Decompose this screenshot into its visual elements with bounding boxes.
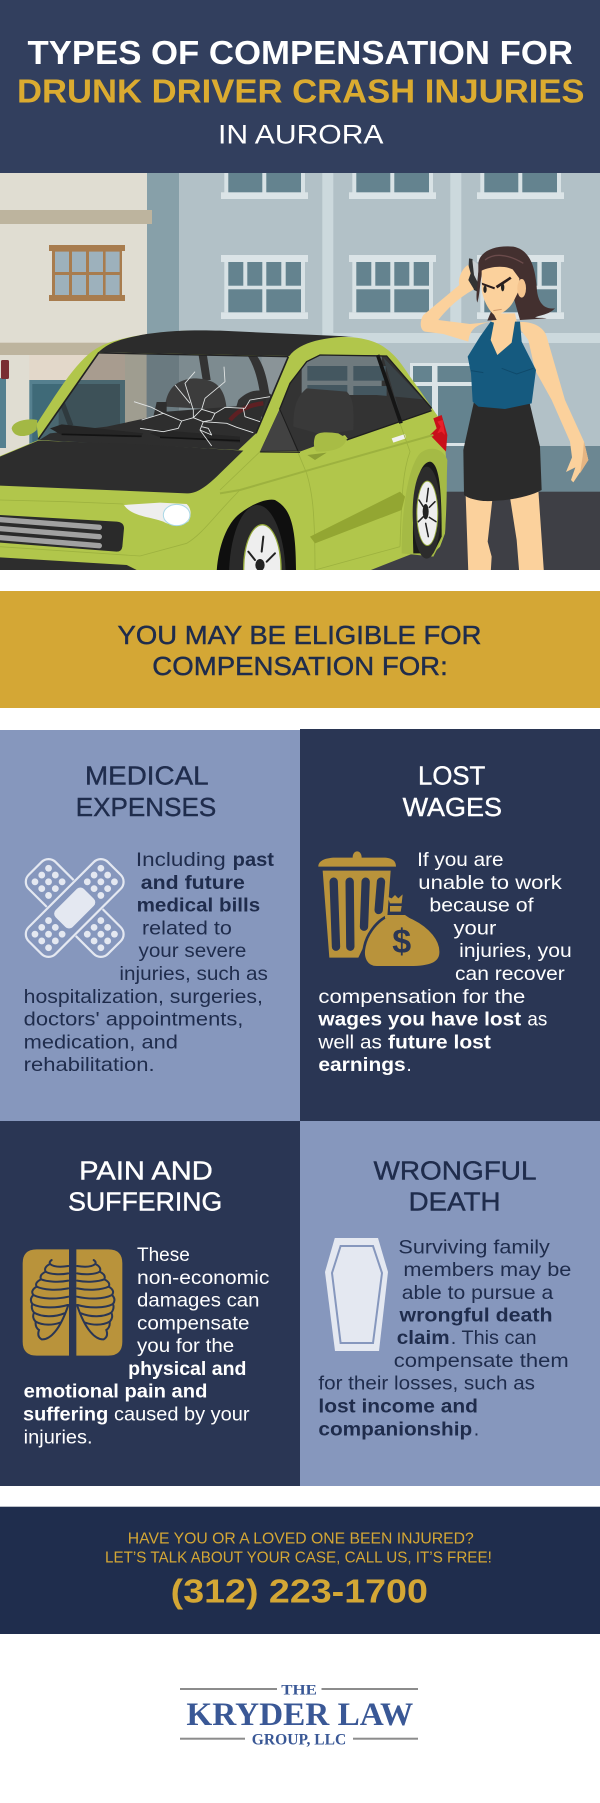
text: lost wages description: unable to work [418, 872, 562, 894]
text: lost wages description: . [406, 1054, 412, 1076]
text: pain and suffering description: compensate [137, 1312, 250, 1334]
phone number: (312) 223-1700 [171, 1573, 428, 1610]
icon: trash can and money bag: $ [392, 923, 411, 961]
logo: The Kryder Law Group: GROUP, LLC [252, 1731, 346, 1748]
text: pain and suffering description [23, 1244, 270, 1448]
text: medical expenses description: Including [136, 849, 226, 871]
text: wrongful death description: members may be [403, 1259, 571, 1281]
text: wrongful death description: for their losses, such as [318, 1373, 535, 1395]
text: lost wages description: earnings [318, 1054, 406, 1076]
text: wrongful death description: lost income and [318, 1396, 478, 1418]
front wheel [216, 500, 296, 570]
heading: lost wages: LOST [418, 761, 485, 791]
call to action panel [0, 1507, 600, 1634]
heading: pain and suffering: PAIN AND [79, 1155, 213, 1185]
text: wrongful death description: claim [397, 1327, 450, 1349]
text: wrongful death description: companionship [318, 1418, 472, 1440]
text: medical expenses description: related to [142, 917, 232, 939]
side window [260, 353, 437, 453]
text: lost wages description: If you are [417, 849, 504, 871]
heading: lost wages [403, 761, 502, 822]
windshield cracks [134, 367, 270, 446]
header panel [0, 0, 600, 173]
heading: medical expenses: EXPENSES [76, 792, 216, 822]
text: lost wages description: injuries, you [459, 940, 572, 962]
banner text [118, 620, 482, 681]
hood [0, 441, 243, 493]
text: medical expenses description: hospitalization, surgeries, [24, 986, 263, 1008]
panel: pain and suffering [0, 1121, 300, 1486]
heading: medical expenses [76, 761, 216, 822]
text: pain and suffering description: emotional pain and [24, 1381, 207, 1403]
text: medical expenses description: past [233, 849, 275, 871]
text: wrongful death description: . This can [451, 1327, 536, 1349]
text: lost wages description: wages you have lost [317, 1009, 522, 1031]
text: lost wages description: can recover [455, 963, 565, 985]
text: wrongful death description: compensate them [394, 1350, 569, 1372]
text: lost wages description [317, 849, 572, 1076]
text: lost wages description: future lost [388, 1031, 491, 1053]
mirrors [12, 419, 37, 436]
heading: lost wages: WAGES [403, 792, 502, 822]
text: wrongful death description: wrongful death [398, 1305, 553, 1327]
heading: pain and suffering: SUFFERING [68, 1186, 222, 1216]
eligibility banner [0, 591, 600, 708]
text: pain and suffering description: you for the [137, 1335, 234, 1357]
heading: wrongful death: WRONGFUL [374, 1155, 536, 1185]
text: medical expenses description: medication, and [24, 1031, 178, 1053]
text: medical expenses description: medical bills [137, 895, 260, 917]
tail light [430, 415, 447, 452]
windshield [33, 350, 293, 453]
logo: The Kryder Law Group [180, 1683, 418, 1748]
text: lost wages description: compensation for the [318, 986, 525, 1008]
heading: wrongful death [374, 1155, 536, 1216]
icon: trash can and money bag [318, 851, 441, 967]
woman on phone [421, 246, 588, 573]
text: pain and suffering description: physical and [128, 1358, 246, 1380]
text: wrongful death description: able to pursue a [402, 1282, 553, 1304]
text: pain and suffering description: caused by your [114, 1404, 250, 1426]
text: lost wages description: well as [317, 1031, 382, 1053]
panel: wrongful death [300, 1121, 600, 1486]
title line 3: IN AURORA [218, 120, 384, 150]
heading: pain and suffering [68, 1155, 222, 1216]
text: medical expenses description: and future [141, 872, 245, 894]
logo: The Kryder Law Group: THE [281, 1683, 317, 1699]
text: lost wages description: your [454, 917, 497, 939]
icon: coffin [325, 1238, 388, 1351]
call to action text line 2: LET’S TALK ABOUT YOUR CASE, CALL US, IT’S FREE! [105, 1549, 492, 1566]
icon: rib cage [23, 1249, 122, 1356]
text: medical expenses description: injuries, such as [119, 963, 268, 985]
rear wheel [402, 449, 447, 559]
title line 1: TYPES OF COMPENSATION FOR [28, 34, 573, 71]
illustration: woman beside crashed car [0, 173, 600, 570]
text: pain and suffering description: suffering [23, 1404, 108, 1426]
icon: crossed bandages [20, 853, 130, 963]
headlight [124, 503, 191, 525]
grille [0, 515, 124, 552]
banner text: COMPENSATION FOR: [152, 651, 448, 681]
text: lost wages description: because of [429, 895, 534, 917]
panel: medical expenses [0, 730, 300, 1121]
text: pain and suffering description: injuries. [24, 1426, 93, 1448]
text: medical expenses description [24, 849, 275, 1076]
text: medical expenses description: rehabilitation. [24, 1054, 155, 1076]
banner text: YOU MAY BE ELIGIBLE FOR [118, 620, 482, 650]
text: wrongful death description: . [474, 1418, 479, 1440]
heading: wrongful death: DEATH [409, 1186, 500, 1216]
text: medical expenses description: doctors' appointments, [24, 1009, 243, 1031]
text: wrongful death description [318, 1236, 571, 1440]
text: medical expenses description: your severe [138, 940, 246, 962]
text: wrongful death description: Surviving family [398, 1236, 550, 1258]
panel: lost wages [300, 729, 600, 1121]
call to action text: HAVE YOU OR A LOVED ONE BEEN INJURED? [128, 1530, 474, 1547]
body creases [0, 423, 410, 572]
title line 2: DRUNK DRIVER CRASH INJURIES [17, 72, 584, 110]
logo: The Kryder Law Group: KRYDER LAW [186, 1697, 413, 1733]
text: lost wages description: as [527, 1009, 548, 1031]
car [0, 330, 448, 570]
text: pain and suffering description: damages can [137, 1290, 260, 1312]
heading: medical expenses: MEDICAL [85, 761, 209, 791]
text: pain and suffering description: These [137, 1244, 190, 1266]
text: pain and suffering description: non-economic [137, 1267, 270, 1289]
